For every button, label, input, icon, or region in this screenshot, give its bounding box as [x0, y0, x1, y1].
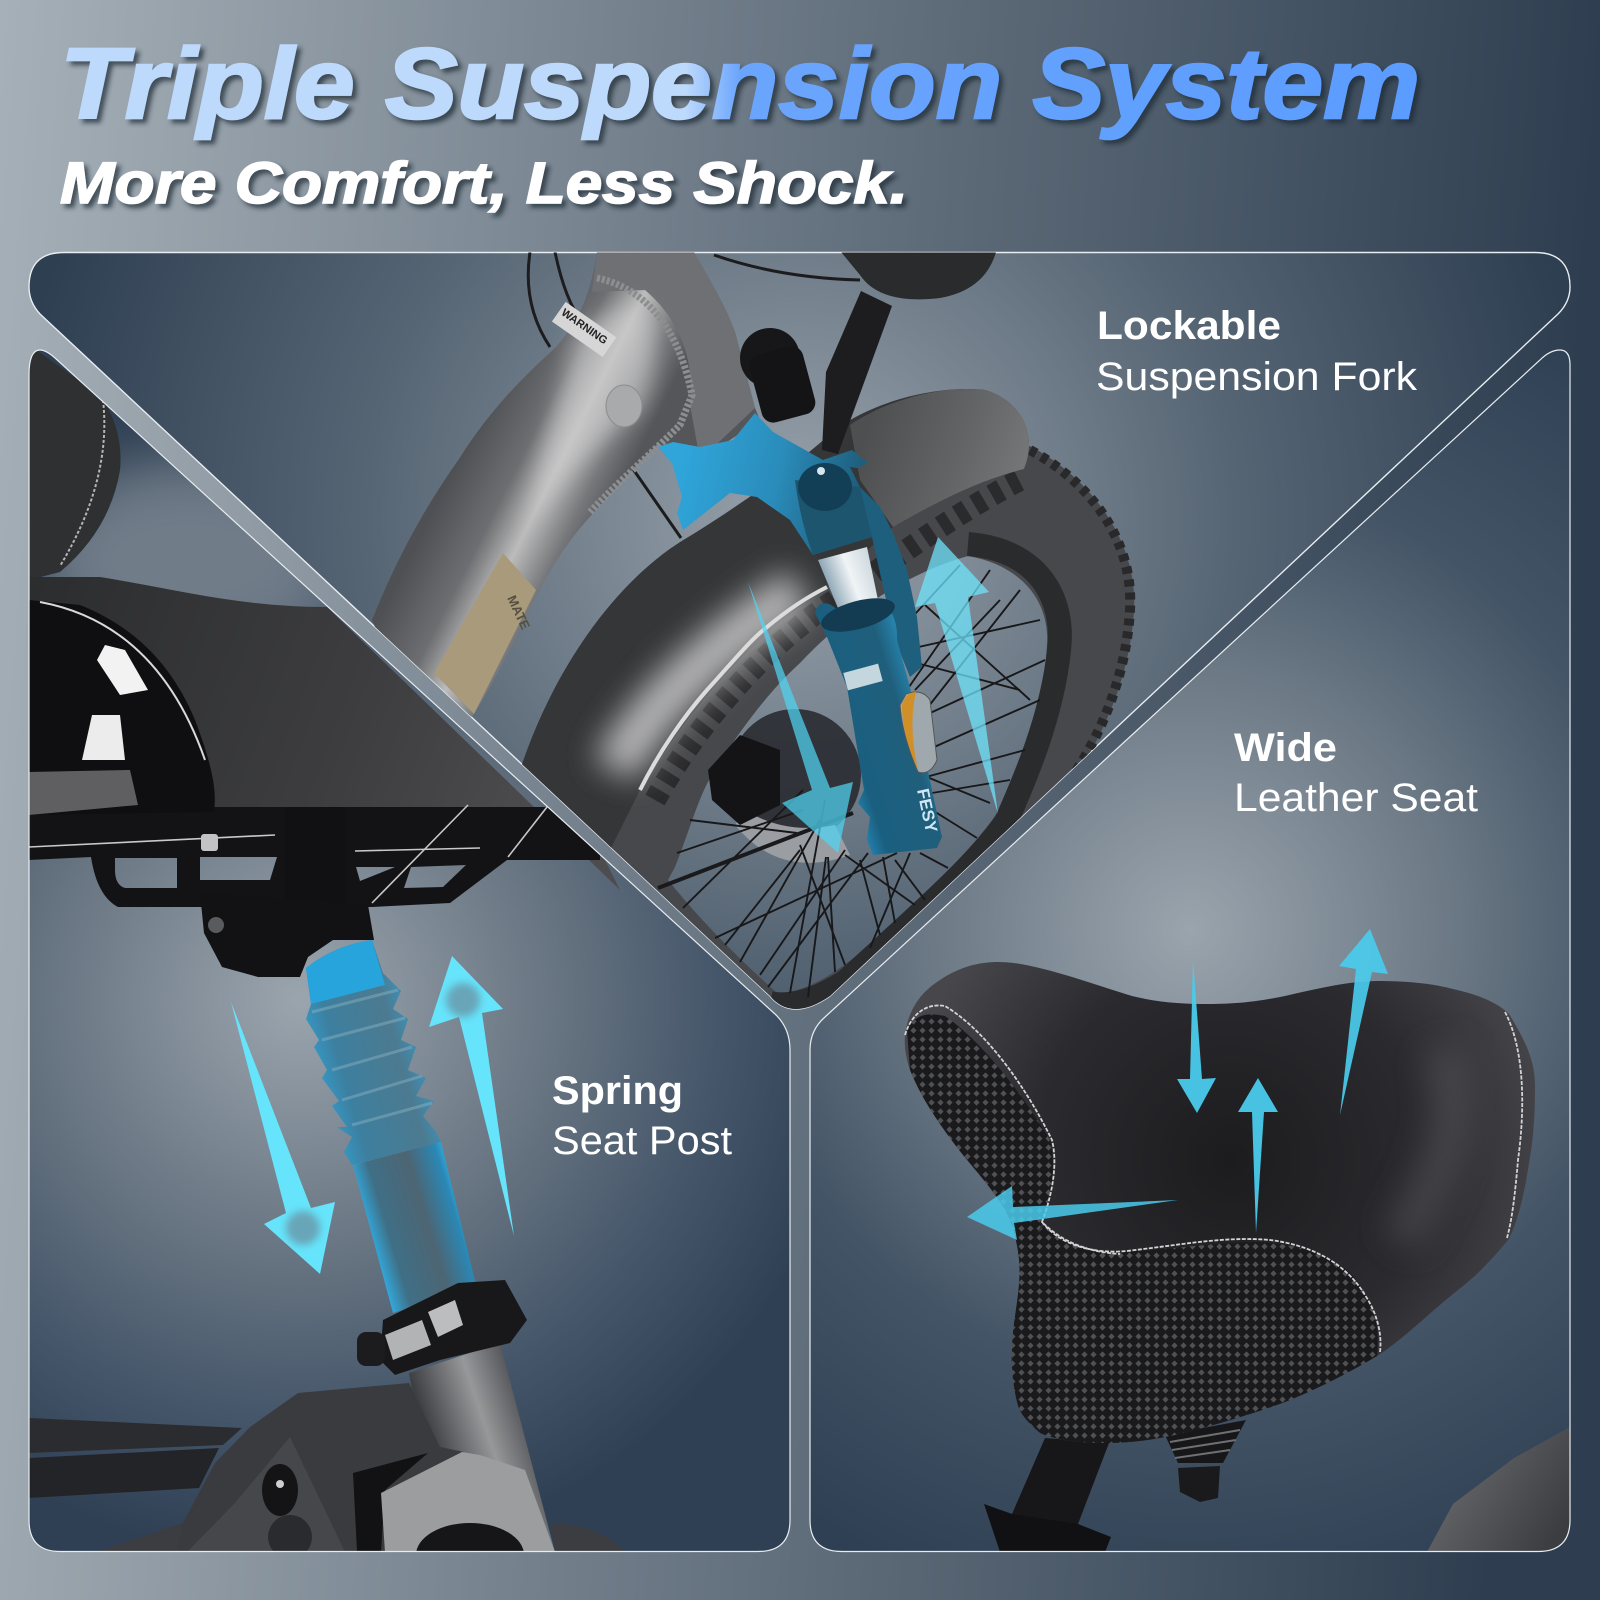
rack nut	[201, 834, 218, 851]
frame tube	[372, 252, 760, 760]
arrow: seat down	[1177, 959, 1216, 1113]
backrest cushion	[29, 345, 121, 580]
battery recess	[353, 1453, 428, 1552]
inner tread	[655, 478, 1024, 800]
fork lower leg	[815, 600, 942, 855]
seat right highlight	[1400, 1050, 1452, 1240]
pivot knob	[416, 1523, 524, 1587]
lockout knob	[740, 328, 818, 425]
boot top cuff	[306, 940, 385, 1004]
arrow: seat up right	[1339, 929, 1388, 1115]
tyre	[600, 446, 1134, 1030]
frame bars	[29, 1418, 242, 1498]
seat post boot	[306, 940, 441, 1165]
lower seat tube	[409, 1343, 555, 1552]
label: wide leather seat: Leather Seat	[1234, 776, 1478, 820]
label: lockable suspension fork: Suspension Fork	[1096, 355, 1418, 399]
label: spring seat post	[552, 1069, 732, 1163]
arrow: post up	[429, 956, 514, 1236]
label: lockable suspension fork: Lockable	[1097, 304, 1281, 348]
backrest stitching	[60, 400, 104, 566]
headlight bracket	[822, 291, 892, 454]
label: lockable suspension fork	[1096, 304, 1418, 399]
panel: wide leather seat	[810, 350, 1570, 1552]
fork leg logo: FESY	[913, 787, 941, 835]
fork crown dark barrel	[795, 480, 872, 555]
brake disc	[729, 709, 861, 863]
fork sticker	[843, 664, 883, 690]
arrow: fork down	[748, 582, 853, 853]
clamp bolt	[208, 917, 224, 933]
seat shell	[905, 962, 1535, 1443]
post clamp	[984, 1504, 1111, 1552]
wheel spokes	[677, 565, 1045, 997]
fender	[520, 389, 1029, 850]
frame logo	[434, 553, 536, 714]
fender edge	[640, 587, 827, 790]
gloss band	[29, 770, 138, 815]
fork collar	[821, 598, 895, 632]
rack highlights	[29, 805, 547, 903]
frame logo: MATE	[504, 593, 533, 632]
arrow: post down	[231, 1002, 335, 1274]
arrow: fork up	[915, 537, 998, 814]
frame head highlight	[525, 305, 654, 530]
textured front panel	[1012, 1225, 1378, 1443]
warning sticker: WARNING	[559, 307, 609, 347]
glossy seat end	[29, 600, 215, 815]
post clamp	[357, 1280, 527, 1375]
warning sticker	[552, 302, 616, 357]
boot ribs	[312, 990, 432, 1125]
upper background glow	[40, 460, 340, 660]
fork crown and blade	[658, 413, 922, 677]
fender nose	[850, 389, 1029, 527]
seat rack and underside	[29, 807, 600, 907]
panel: spring seat post	[29, 345, 790, 1587]
coil spring	[1165, 1420, 1246, 1463]
battery side panel	[187, 1437, 345, 1552]
rim	[770, 544, 1060, 1004]
gloss highlight lower	[82, 715, 125, 760]
battery switch	[262, 1464, 312, 1559]
fender highlight	[615, 590, 800, 770]
label: spring seat post: Seat Post	[552, 1119, 732, 1163]
seat stitching	[905, 1005, 1522, 1352]
battery box	[176, 1383, 464, 1552]
gloss highlight upper	[97, 645, 148, 695]
frame head shade	[592, 252, 755, 460]
seat clamp	[200, 893, 374, 977]
seat body	[29, 577, 620, 890]
arrow: seat left	[967, 1186, 1178, 1240]
rack support	[285, 807, 345, 905]
seat post tube	[353, 1142, 476, 1313]
title: Triple Suspension System	[60, 28, 1420, 140]
label: spring seat post: Spring	[552, 1069, 683, 1113]
rear fender	[1427, 1427, 1570, 1552]
panel: lockable suspension fork	[29, 252, 1570, 1030]
textured nose flank	[907, 1014, 1053, 1259]
subtitle: More Comfort, Less Shock.	[60, 151, 908, 216]
tube sleeve	[381, 1452, 555, 1552]
caliper	[708, 735, 780, 825]
label: wide leather seat: Wide	[1234, 726, 1337, 770]
gloss edge	[40, 602, 205, 760]
label: wide leather seat	[1234, 726, 1478, 820]
spring nut	[1178, 1466, 1220, 1502]
weld seam	[590, 278, 692, 512]
headlight	[841, 252, 996, 299]
rear frame stub	[96, 1523, 626, 1552]
brake cables	[528, 252, 860, 538]
tyre tread	[1030, 450, 1130, 800]
frame plug	[606, 385, 642, 427]
seat post	[1012, 1438, 1109, 1552]
fork stanchion	[818, 547, 878, 613]
reflector	[900, 692, 937, 773]
arrow: seat up centre	[1238, 1078, 1278, 1233]
fork crown cap	[798, 463, 852, 511]
